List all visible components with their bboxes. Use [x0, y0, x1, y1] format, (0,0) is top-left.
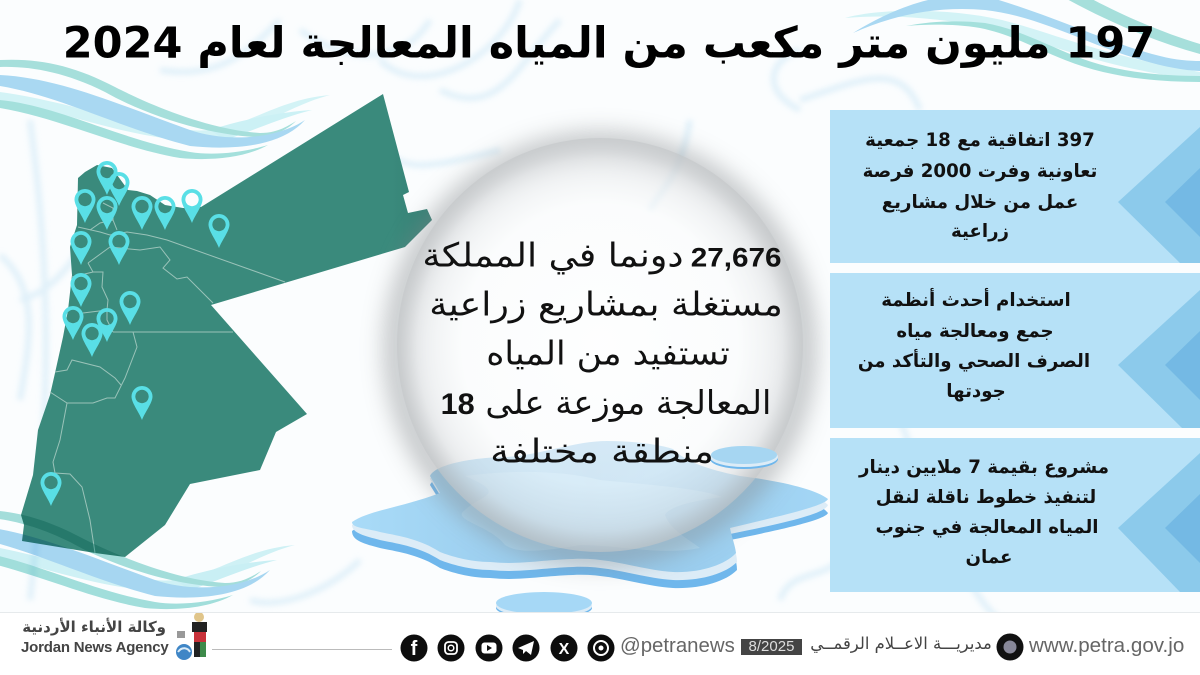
central text in lens: منطقة مختلفة: [490, 432, 714, 470]
small water disc right: [710, 446, 778, 469]
panel 3 text: [858, 457, 1109, 568]
panel 2 text: جودتها: [946, 381, 1006, 402]
waves: bottom left: [0, 510, 295, 609]
social media icons: [400, 634, 614, 662]
panel 2 text: الصرف الصحي والتأكد من: [858, 351, 1090, 372]
small water disc bottom: [496, 592, 592, 618]
agency logo text: Jordan News Agency: [21, 639, 169, 656]
waves: top right: [845, 0, 1200, 82]
panel 3 text: لتنفيذ خطوط ناقلة لنقل: [876, 487, 1096, 508]
panel: treatment systems: [830, 273, 1200, 428]
governorate borders: [50, 203, 285, 553]
panel 2 text: [858, 288, 1090, 402]
panel: agreements: [830, 110, 1200, 263]
map of Jordan: [21, 94, 432, 557]
panel 1 text: تعاونية وفرت 2000 فرصة: [863, 161, 1097, 182]
panel 1 text: [863, 130, 1097, 242]
website: www.petra.gov.jo: [1029, 634, 1184, 657]
social media icons: X: [559, 641, 570, 658]
social media icons: f: [411, 638, 418, 660]
panel 3 text: عمان: [966, 547, 1012, 568]
panel 3 text: المياه المعالجة في جنوب: [875, 517, 1099, 538]
central text in lens: [422, 236, 783, 470]
panel 2 text: استخدام أحدث أنظمة: [881, 290, 1071, 311]
central text in lens: المعالجة موزعة على 18: [441, 383, 771, 422]
central text in lens: 27,676 دونما في المملكة: [422, 236, 782, 274]
magnifying lens: [397, 138, 803, 553]
chevron 2: [1118, 290, 1200, 428]
footer: [0, 612, 1200, 675]
panel 1 text: عمل من خلال مشاريع: [882, 192, 1078, 213]
panel 1 text: 397 اتفاقية مع 18 جمعية: [865, 130, 1095, 151]
agency logo text: وكالة الأنباء الأردنية: [22, 618, 166, 636]
chevron 3: [1118, 453, 1200, 592]
icon: petra emblem: [996, 634, 1024, 660]
agency logo text: [21, 618, 169, 656]
icon: flag and globe: [176, 613, 207, 660]
location pins: [40, 161, 230, 506]
panel 1 text: زراعية: [951, 221, 1009, 242]
water puddle: [352, 441, 828, 588]
panel: 7 million project: [830, 438, 1200, 592]
divider line: [212, 649, 392, 650]
panel 3 text: مشروع بقيمة 7 ملايين دينار: [859, 457, 1109, 478]
central text in lens: مستغلة بمشاريع زراعية: [429, 284, 783, 324]
decorative background veins: [0, 0, 1000, 620]
social handle: @petranews: [620, 635, 735, 657]
title: 197 مليون متر مكعب من المياه المعالجة لعام 2024: [63, 18, 1155, 68]
panel 2 text: جمع ومعالجة مياه: [896, 321, 1054, 342]
central text in lens: تستفيد من المياه: [486, 334, 730, 372]
digital media directorate: مديريـــة الاعــلام الرقمــي: [810, 634, 992, 653]
waves: top left: [0, 60, 330, 159]
chevron 1: [1118, 127, 1200, 263]
date badge: 8/2025: [749, 638, 794, 655]
